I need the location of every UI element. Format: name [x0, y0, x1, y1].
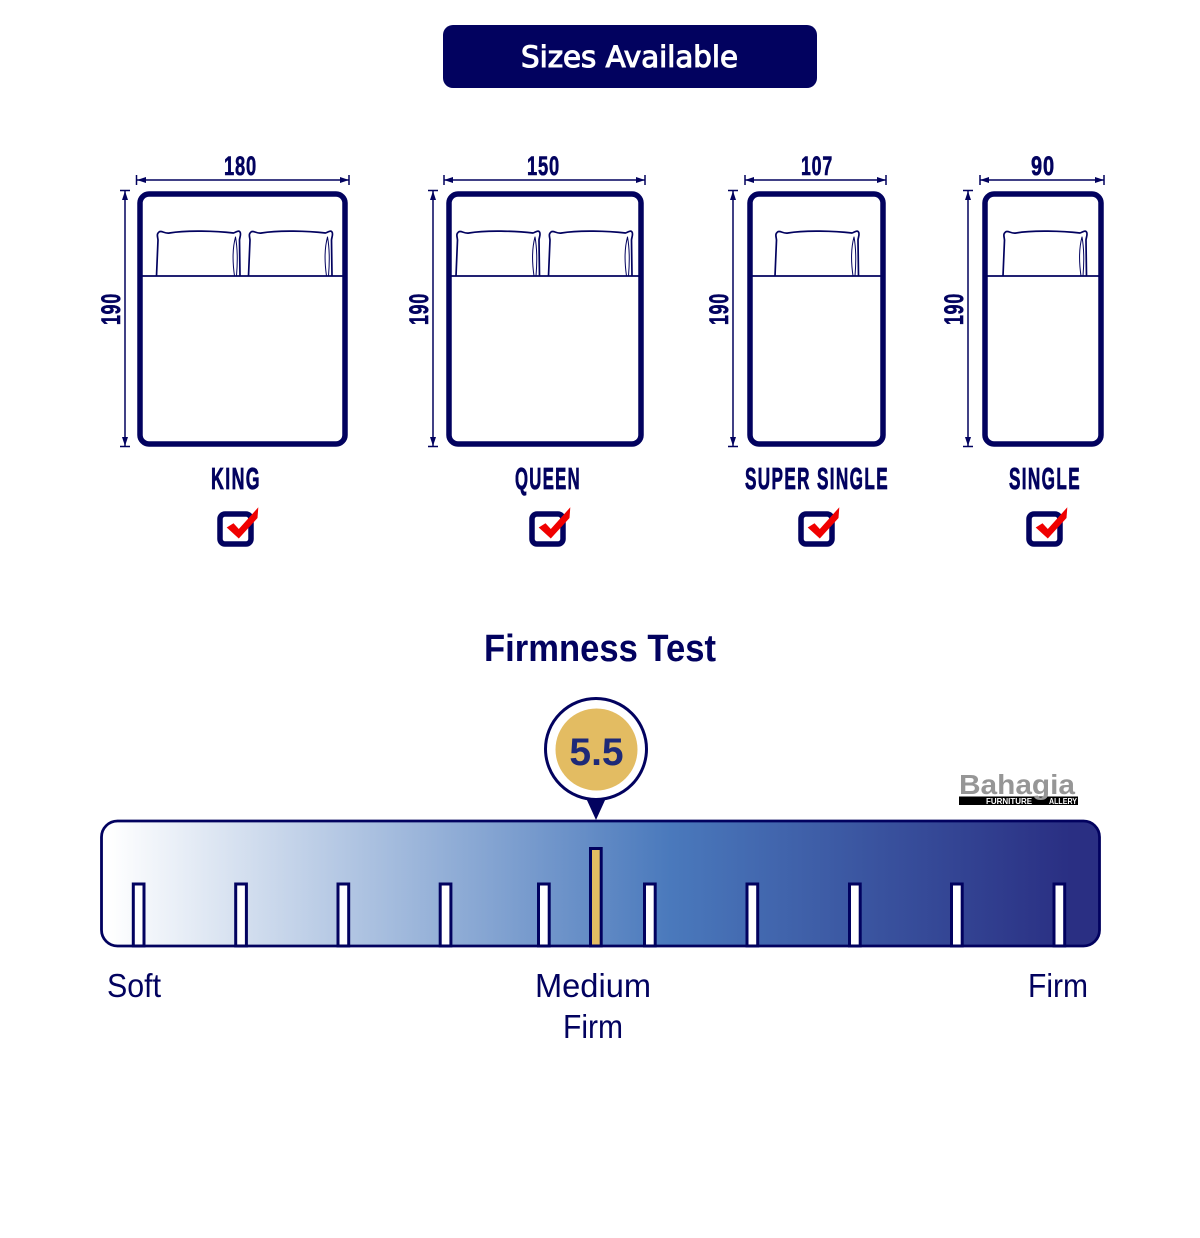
- firmness scale bar: [102, 821, 1100, 946]
- bed outline with pillows: [140, 194, 345, 444]
- width dimension: 107: [745, 151, 886, 185]
- gold marker at 5.5: [590, 848, 601, 946]
- height dimension: 190: [939, 190, 973, 446]
- scale label: soft: Soft: [107, 967, 161, 1004]
- bed outline with pillows: [449, 194, 641, 444]
- label: queen: QUEEN: [515, 461, 581, 496]
- width dimension: 90: [980, 151, 1104, 185]
- rating pin: 5.5: 5.5: [569, 731, 624, 774]
- width dimension: 180: 180: [224, 151, 257, 181]
- width dimension: 150: 150: [527, 151, 560, 181]
- height dimension: 190: [404, 190, 438, 446]
- width dimension: 150: [444, 151, 645, 185]
- width dimension: 90: 90: [1031, 151, 1055, 181]
- height dimension: 190: 190: [704, 293, 734, 325]
- panel: super single bed: [704, 151, 889, 544]
- scale label: medium firm: Firm: [563, 1008, 623, 1045]
- scale label: medium firm: [535, 967, 651, 1045]
- logo: bahagia furniture gallery: ALLERY: [1049, 797, 1078, 806]
- checkbox: [532, 507, 570, 544]
- scale label: firm: Firm: [1028, 967, 1088, 1004]
- panel: king bed: [96, 151, 349, 544]
- heading: firmness test: Firmness Test: [484, 628, 716, 670]
- checkbox: [801, 507, 839, 544]
- bed outline with pillow: [750, 194, 883, 444]
- bed outline with pillow: [985, 194, 1101, 444]
- panel: single bed: [939, 151, 1104, 544]
- height dimension: 190: [96, 190, 130, 446]
- logo: bahagia furniture gallery: FURNITURE: [986, 797, 1033, 806]
- checkbox: [220, 507, 258, 544]
- width dimension: 180: [136, 151, 349, 185]
- label: super single: SUPER SINGLE: [745, 461, 889, 496]
- height dimension: 190: 190: [96, 293, 126, 325]
- checkbox: [1029, 507, 1067, 544]
- panel: queen bed: [404, 151, 645, 544]
- height dimension: 190: 190: [939, 293, 969, 325]
- height dimension: 190: [704, 190, 738, 446]
- label: single: SINGLE: [1009, 461, 1081, 496]
- rating pin: 5.5: [546, 698, 646, 820]
- width dimension: 107: 107: [801, 151, 833, 181]
- logo: bahagia furniture gallery: Bahagia: [959, 769, 1075, 800]
- height dimension: 190: 190: [404, 293, 434, 325]
- scale label: medium firm: Medium: [535, 967, 651, 1004]
- title: sizes available: Sizes Available: [521, 40, 738, 74]
- scale ticks: [133, 884, 1065, 946]
- title: sizes available: [443, 25, 817, 88]
- label: king: KING: [211, 461, 261, 496]
